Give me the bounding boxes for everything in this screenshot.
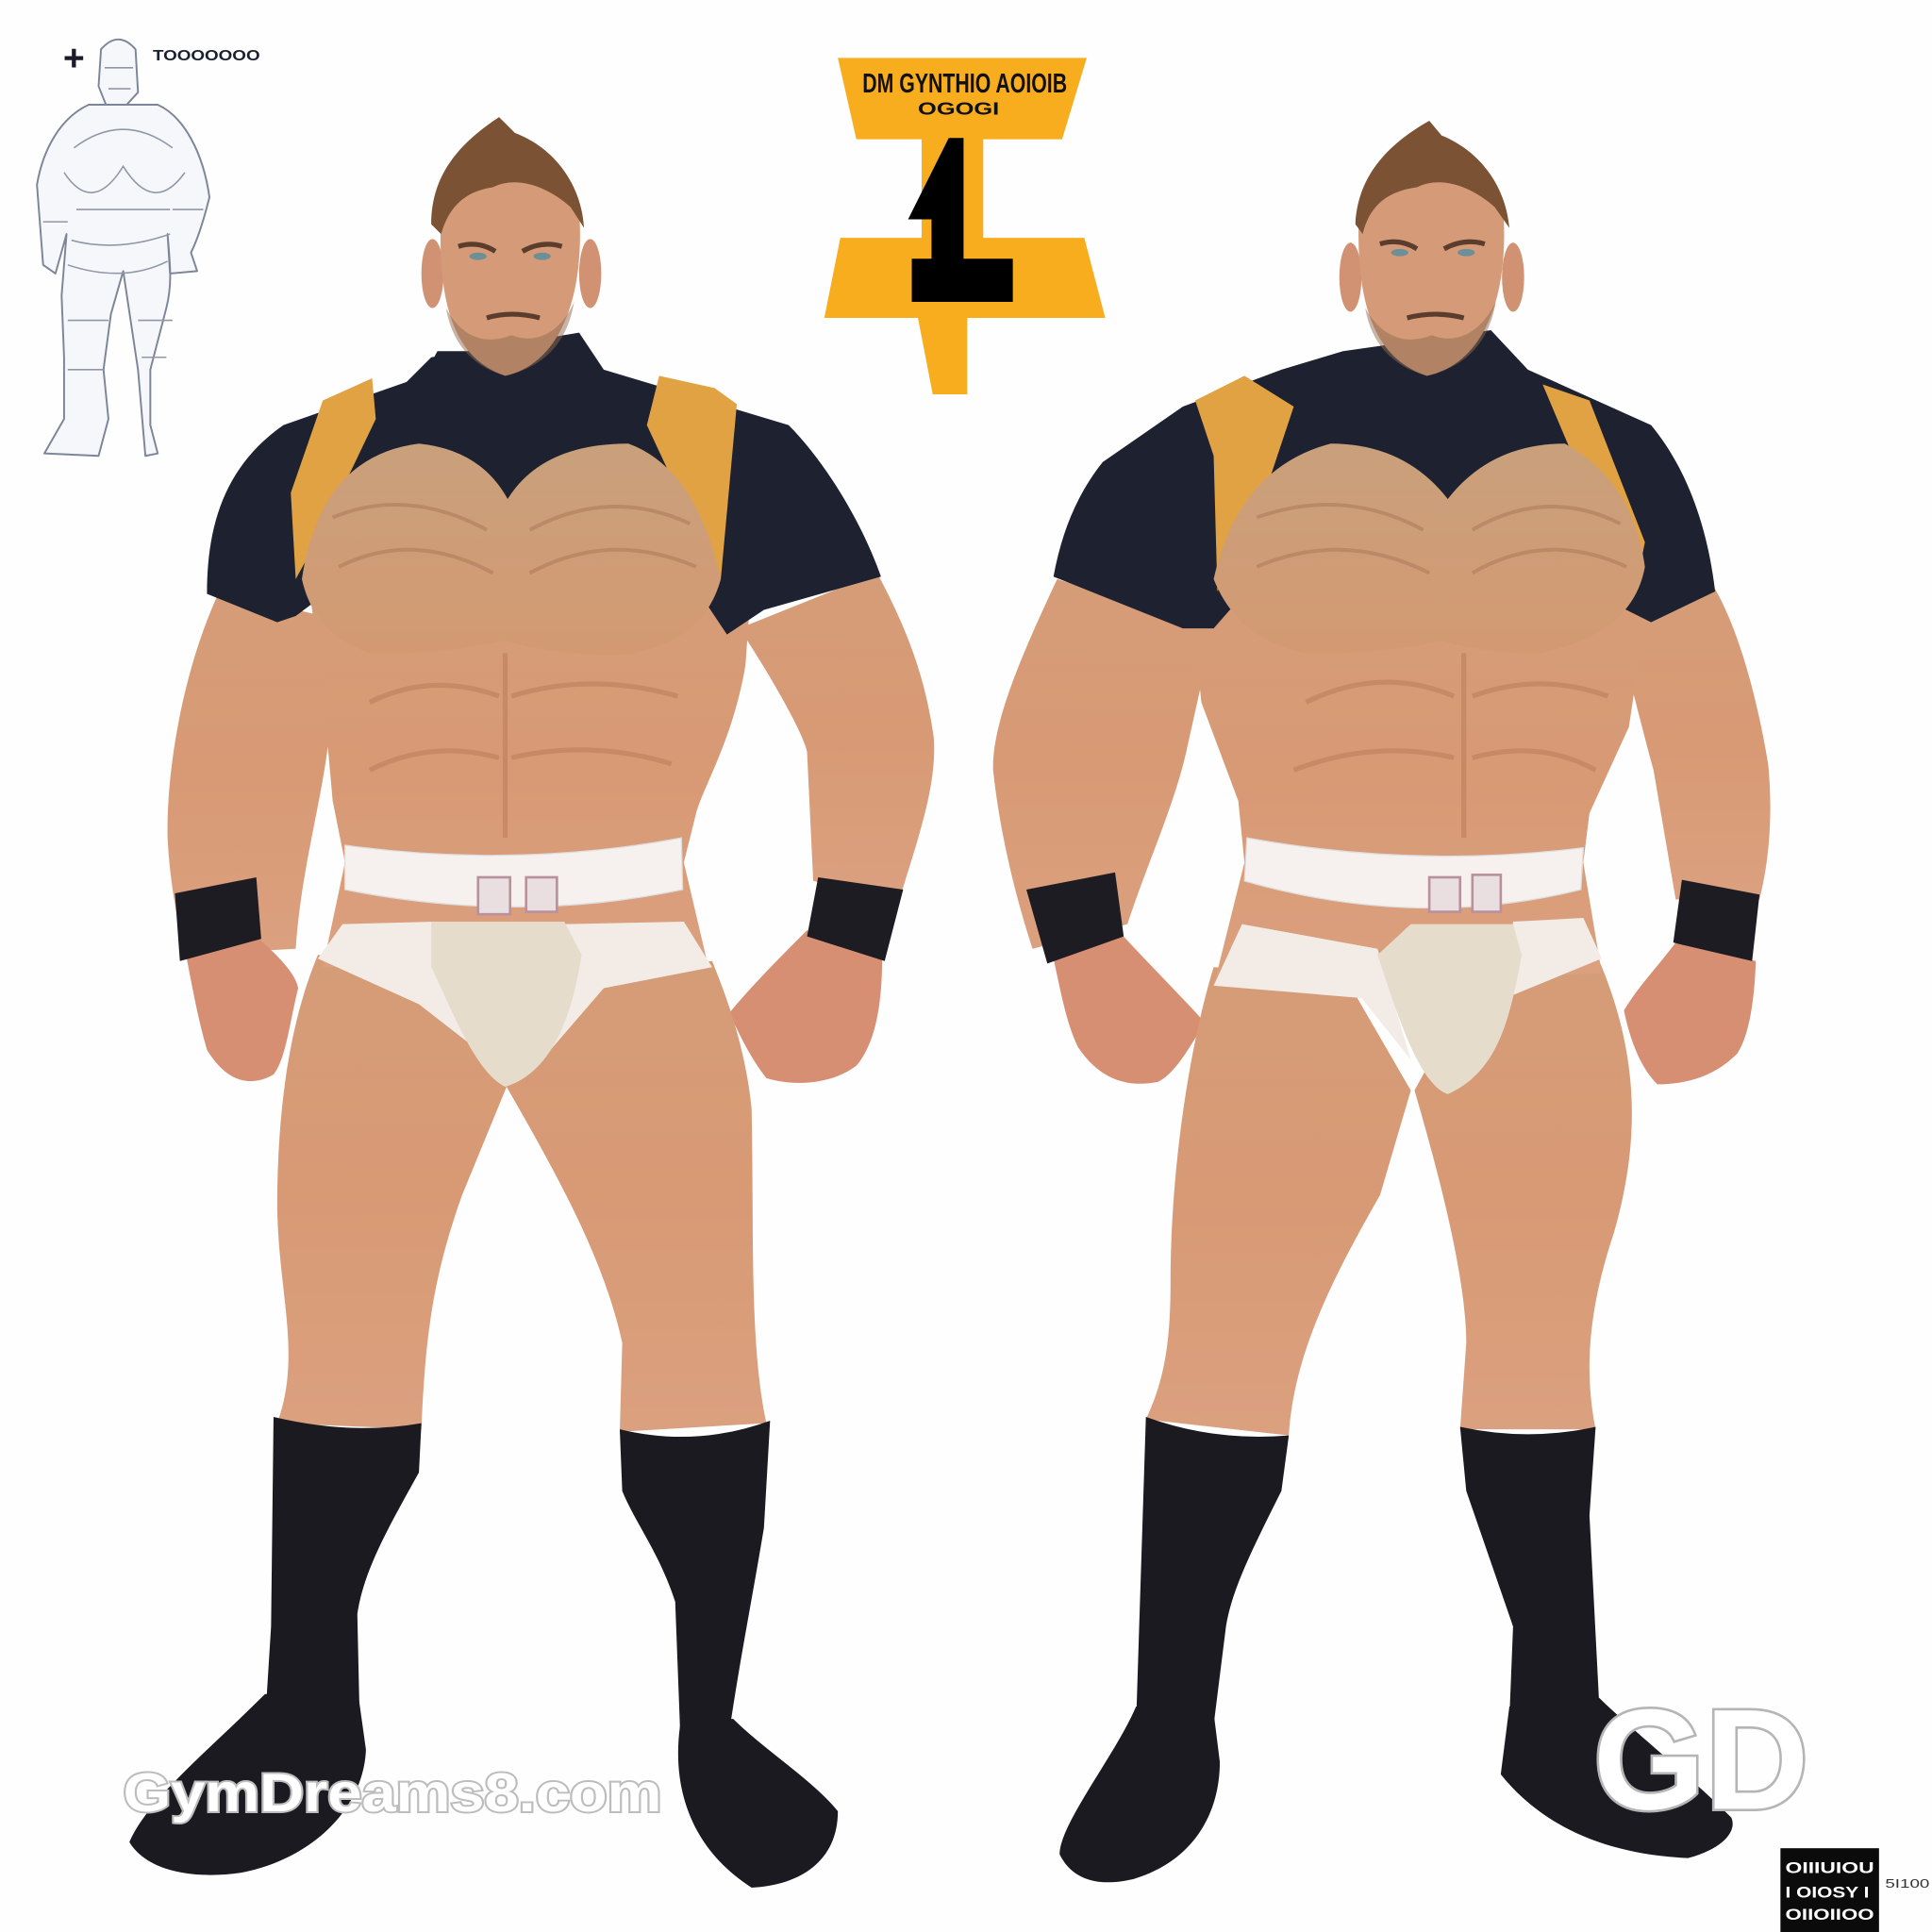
GD logo: GD [1593,1680,1808,1840]
left figure [129,117,934,1888]
right figure [993,121,1771,1882]
sketch plus mark: + [63,38,85,78]
left figure chest hair texture [333,505,696,573]
label text: I OIOSY I [1786,1883,1869,1901]
left figure hands [185,930,882,1083]
label text [1786,1858,1874,1924]
left figure arms [168,573,934,955]
left figure wristbands [175,877,903,961]
jersey heading text: DM GYNTHIO AOIOIB [862,69,1067,99]
left figure legs [277,955,766,1432]
right figure chest [1214,443,1645,653]
right figure abs shading [1293,653,1607,838]
right figure head and neck [1312,121,1524,419]
left figure abs shading [370,653,677,838]
right figure wristbands [1026,873,1759,963]
label text: OIIOIIOO [1786,1906,1874,1924]
right figure belt labels [1429,874,1501,912]
big number 1 [908,138,1013,302]
right figure belt [1244,838,1583,908]
QR-style label [1780,1848,1929,1932]
right figure torso [1189,579,1651,986]
label text: OIIIUIOU [1786,1858,1874,1876]
left figure socks and shoes [129,1417,838,1888]
left figure shirt [207,333,881,635]
sketch construction lines [43,68,204,370]
left figure belt labels [478,877,557,914]
right figure orange straps [1195,375,1645,591]
right figure hands [1054,934,1756,1084]
jersey subheading text: OGOGI [918,98,999,118]
left figure torso [308,579,752,967]
left figure belt [345,838,683,907]
side label text: 5I100 [1885,1876,1929,1890]
left figure briefs [318,922,712,1087]
right figure legs [1146,961,1632,1436]
orange jersey shape [824,58,1106,394]
right figure arms [993,579,1771,949]
black label block [1780,1848,1879,1932]
right figure chest hair texture [1257,505,1626,573]
left figure head and neck [413,117,601,423]
left figure orange straps [291,375,737,579]
watermark text: GymDreams8.com [124,1763,661,1824]
left figure chest [302,443,721,656]
right figure briefs [1214,918,1602,1094]
jersey graphic with number 1 [824,58,1106,394]
sketch figure outline [37,40,209,456]
right figure socks and shoes [1059,1417,1733,1882]
reference sketch [37,38,260,456]
sketch label: TOOOOOOO [153,48,260,64]
right figure shirt [1054,330,1715,628]
